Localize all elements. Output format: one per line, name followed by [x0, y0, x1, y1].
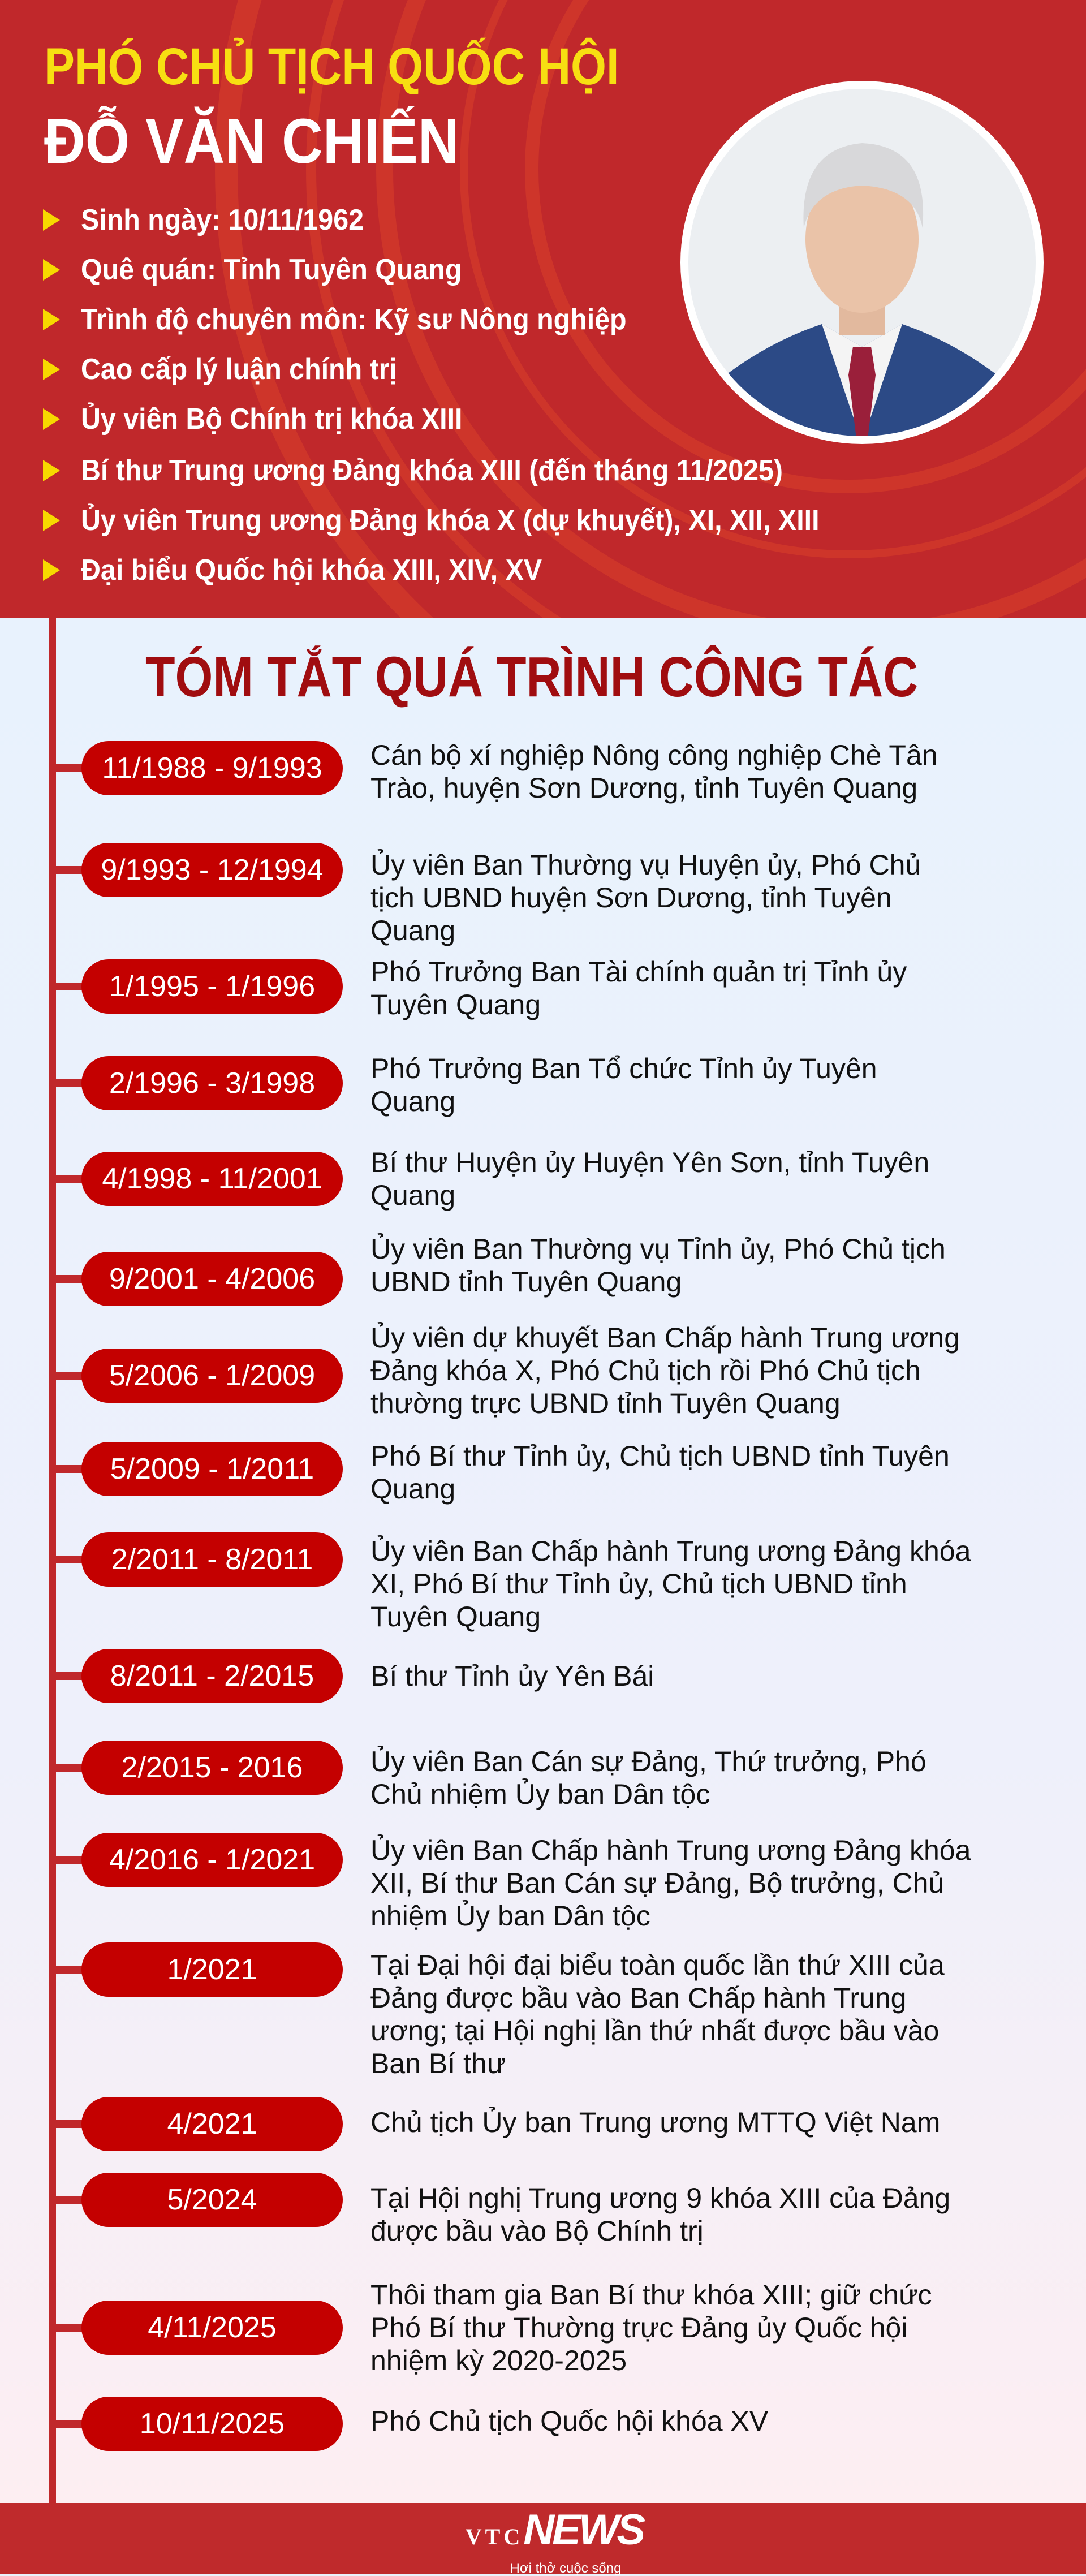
text 16: Phó Bí thư Thường trực Đảng ủy Quốc hội: [370, 2312, 907, 2344]
text 5: [370, 1147, 929, 1211]
item 3: [56, 959, 343, 1014]
bullet list: Quê quán: Tỉnh Tuyên Quang: [81, 253, 462, 286]
text 7: thường trực UBND tỉnh Tuyên Quang: [370, 1388, 841, 1419]
bullet list: Trình độ chuyên môn: Kỹ sư Nông nghiệp: [81, 303, 627, 336]
text 9: Ủy viên Ban Chấp hành Trung ương Đảng khóa: [370, 1535, 971, 1567]
text 15: được bầu vào Bộ Chính trị: [370, 2215, 704, 2247]
bullet list: [43, 204, 820, 587]
item 1: 11/1988 - 9/1993: [102, 752, 322, 785]
bullet: birth: [43, 204, 364, 236]
item 2: 9/1993 - 12/1994: [101, 854, 324, 886]
bullet: hometown: [43, 253, 462, 286]
title: PHÓ CHỦ TỊCH QUỐC HỘI: [44, 38, 619, 96]
text 12: [370, 1834, 971, 1932]
bullet list: Bí thư Trung ương Đảng khóa XIII (đến tháng 11/2025): [81, 454, 783, 487]
item 9: 2/2011 - 8/2011: [111, 1543, 313, 1576]
timeline panel: [0, 618, 1086, 2503]
text 13: Ban Bí thư: [370, 2048, 506, 2079]
text 6: UBND tỉnh Tuyên Quang: [370, 1266, 682, 1298]
item 10: [56, 1649, 343, 1703]
text 14: Chủ tịch Ủy ban Trung ương MTTQ Việt Nam: [370, 2107, 940, 2138]
item 2: [56, 843, 343, 897]
text 11: Chủ nhiệm Ủy ban Dân tộc: [370, 1778, 710, 1810]
logo: VTC News: VTCNEWS: [466, 2506, 643, 2554]
header panel: [0, 0, 1086, 618]
text 4: Quang: [370, 1085, 455, 1117]
text 13: Tại Đại hội đại biểu toàn quốc lần thứ XIII của: [370, 1949, 945, 1981]
text 4: [370, 1053, 877, 1117]
text 7: [370, 1322, 960, 1419]
item 12: [56, 1833, 343, 1887]
logo: VTC News: [441, 2511, 667, 2568]
item 13: [56, 1942, 343, 1997]
text 3: Tuyên Quang: [370, 989, 541, 1020]
name: ĐỖ VĂN CHIẾN: [44, 106, 459, 176]
item 11: 2/2015 - 2016: [122, 1751, 303, 1784]
text 2: tịch UBND huyện Sơn Dương, tỉnh Tuyên: [370, 882, 892, 914]
text 3: Phó Trưởng Ban Tài chính quản trị Tỉnh ủy: [370, 956, 907, 988]
text 2: Ủy viên Ban Thường vụ Huyện ủy, Phó Chủ: [370, 849, 921, 881]
text 3: [370, 956, 907, 1020]
item 13: 1/2021: [167, 1953, 257, 1986]
text 5: Bí thư Huyện ủy Huyện Yên Sơn, tỉnh Tuyên: [370, 1147, 929, 1178]
bullet list: Đại biểu Quốc hội khóa XIII, XIV, XV: [81, 554, 542, 587]
text 6: [370, 1233, 946, 1298]
bullet: politburo: [43, 402, 462, 436]
item 5: [56, 1152, 343, 1206]
text 2: Quang: [370, 915, 455, 946]
item 3: 1/1995 - 1/1996: [109, 970, 315, 1003]
text 16: Thôi tham gia Ban Bí thư khóa XIII; giữ chức: [370, 2279, 932, 2311]
bullet list: Sinh ngày: 10/11/1962: [81, 204, 364, 236]
item 6: [56, 1252, 343, 1306]
text 10: Bí thư Tỉnh ủy Yên Bái: [370, 1660, 654, 1692]
footer: Hơi thở cuộc sống: [510, 2561, 621, 2576]
text 13: Đảng được bầu vào Ban Chấp hành Trung: [370, 1982, 906, 2014]
bullet: politics: [43, 353, 397, 386]
text 17: Phó Chủ tịch Quốc hội khóa XV: [370, 2405, 768, 2437]
item 10: 8/2011 - 2/2015: [110, 1660, 314, 1692]
section heading: TÓM TẮT QUÁ TRÌNH CÔNG TÁC: [145, 645, 918, 709]
text 1: [370, 739, 938, 804]
text 7: Ủy viên dự khuyết Ban Chấp hành Trung ương: [370, 1322, 960, 1354]
text 5: Quang: [370, 1179, 455, 1211]
text 13: [370, 1949, 945, 2079]
decorative drum pattern: [215, 0, 1086, 618]
item 4: 2/1996 - 3/1998: [109, 1067, 315, 1100]
text 12: nhiệm Ủy ban Dân tộc: [370, 1900, 650, 1932]
item 14: [56, 2097, 343, 2151]
item 17: 10/11/2025: [140, 2407, 285, 2440]
item 16: 4/11/2025: [148, 2311, 277, 2344]
item 12: 4/2016 - 1/2021: [109, 1843, 315, 1876]
text 16: [370, 2279, 932, 2376]
bullet list: Cao cấp lý luận chính trị: [81, 353, 397, 386]
item 6: 9/2001 - 4/2006: [109, 1263, 315, 1295]
text 12: Ủy viên Ban Chấp hành Trung ương Đảng khóa: [370, 1834, 971, 1866]
item 14: 4/2021: [167, 2108, 257, 2140]
text 9: [370, 1535, 971, 1632]
bullet: central committee: [43, 503, 820, 537]
bullet list: Ủy viên Bộ Chính trị khóa XIII: [81, 403, 462, 436]
item 8: [56, 1442, 343, 1496]
footer: [0, 2503, 1086, 2574]
text 2: [370, 849, 921, 946]
item 15: [56, 2173, 343, 2227]
item 11: [56, 1741, 343, 1795]
text 1: Trào, huyện Sơn Dương, tỉnh Tuyên Quang: [370, 772, 917, 804]
item 8: 5/2009 - 1/2011: [110, 1453, 314, 1485]
text 8: Phó Bí thư Tỉnh ủy, Chủ tịch UBND tỉnh Tuyên: [370, 1440, 950, 1472]
text 11: [370, 1746, 926, 1810]
text 13: ương; tại Hội nghị lần thứ nhất được bầu vào: [370, 2015, 939, 2047]
item 9: [56, 1532, 343, 1587]
item 7: [56, 1349, 343, 1403]
text 11: Ủy viên Ban Cán sự Đảng, Thứ trưởng, Phó: [370, 1746, 926, 1777]
text 9: Tuyên Quang: [370, 1601, 541, 1632]
timeline vertical line: [49, 618, 56, 2503]
text 8: Quang: [370, 1473, 455, 1505]
item 16: [56, 2301, 343, 2355]
text 15: [370, 2182, 950, 2247]
text 8: [370, 1440, 950, 1505]
item 17: [49, 2397, 1067, 2451]
text 12: XII, Bí thư Ban Cán sự Đảng, Bộ trưởng, Chủ: [370, 1867, 944, 1899]
text 4: Phó Trưởng Ban Tổ chức Tỉnh ủy Tuyên: [370, 1053, 877, 1084]
text 16: nhiệm kỳ 2020-2025: [370, 2345, 627, 2376]
item 1: [56, 741, 343, 795]
bullet: education: [43, 303, 627, 336]
text 15: Tại Hội nghị Trung ương 9 khóa XIII của Đảng: [370, 2182, 950, 2214]
portrait photo: [680, 81, 1044, 444]
item 5: 4/1998 - 11/2001: [102, 1162, 322, 1195]
bullet: deputy: [43, 554, 542, 587]
bullet: secretariat: [43, 454, 783, 487]
item 15: 5/2024: [167, 2183, 257, 2216]
text 6: Ủy viên Ban Thường vụ Tỉnh ủy, Phó Chủ tịch: [370, 1233, 946, 1265]
bullet list: Ủy viên Trung ương Đảng khóa X (dự khuyết), XI, XII, XIII: [81, 504, 820, 537]
item 4: [56, 1056, 343, 1110]
item 7: 5/2006 - 1/2009: [109, 1359, 315, 1392]
text 7: Đảng khóa X, Phó Chủ tịch rồi Phó Chủ tịch: [370, 1355, 921, 1386]
text 1: Cán bộ xí nghiệp Nông công nghiệp Chè Tân: [370, 739, 938, 771]
text 9: XI, Phó Bí thư Tỉnh ủy, Chủ tịch UBND tỉnh: [370, 1568, 907, 1600]
